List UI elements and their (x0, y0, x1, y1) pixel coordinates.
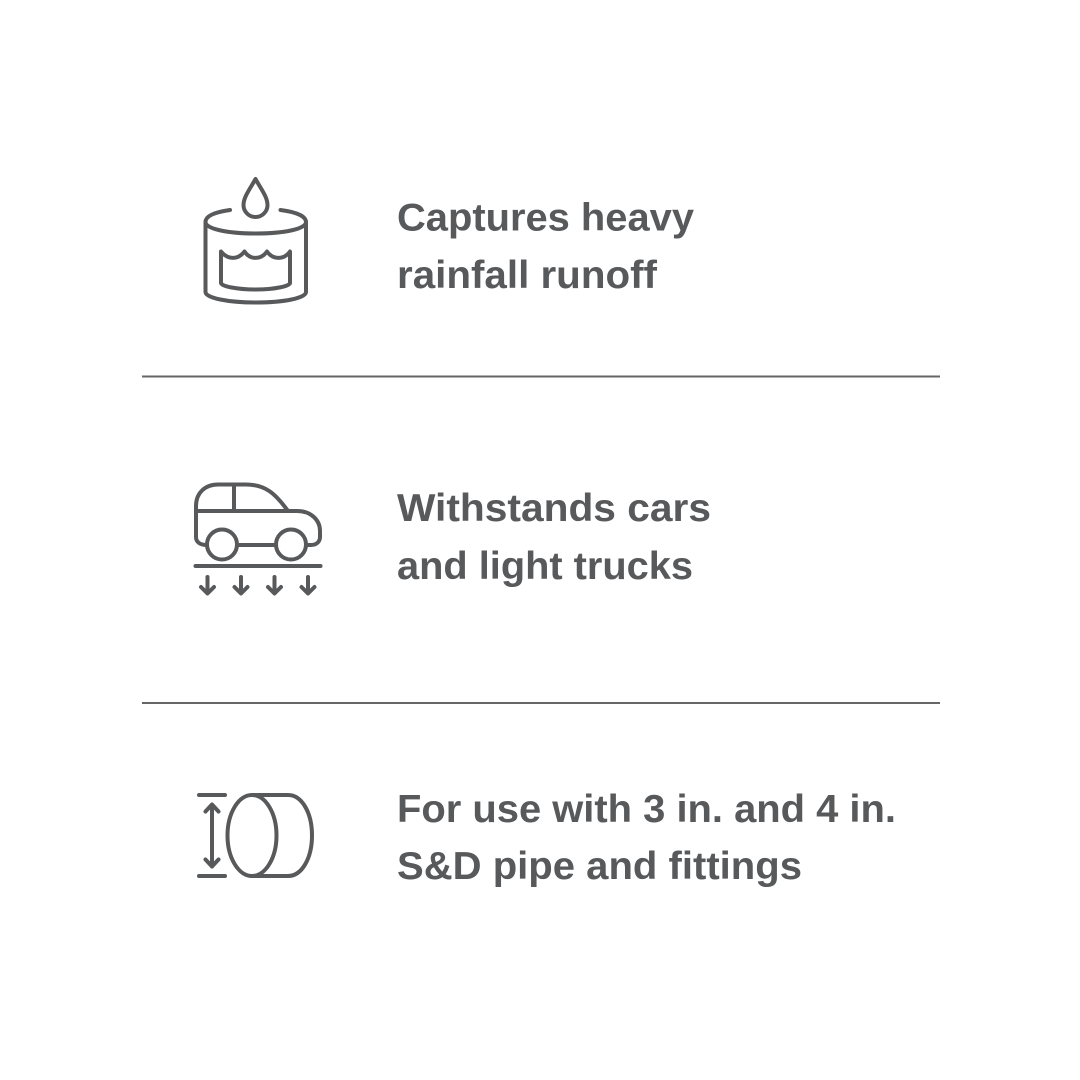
feature text: for use with 3 in. and 4 in. S&D pipe and fittings: S&D pipe and fittings (397, 845, 802, 888)
feature text: captures heavy rainfall runoff: Captures heavy (397, 196, 694, 240)
icon: water drop falling into cylinder (206, 179, 306, 302)
feature text: for use with 3 in. and 4 in. S&D pipe and fittings (397, 788, 896, 888)
feature text: withstands cars and light trucks: Withstands cars (397, 487, 711, 530)
feature text: for use with 3 in. and 4 in. S&D pipe and fittings: For use with 3 in. and 4 in. (397, 788, 896, 831)
feature text: withstands cars and light trucks: and light trucks (397, 545, 693, 588)
icon: car on ground with downward load arrows (196, 484, 320, 594)
feature text: withstands cars and light trucks (397, 487, 711, 588)
icon: pipe with diameter arrow (199, 795, 312, 876)
feature text: captures heavy rainfall runoff (397, 196, 694, 297)
feature text: captures heavy rainfall runoff: rainfall runoff (397, 254, 658, 297)
